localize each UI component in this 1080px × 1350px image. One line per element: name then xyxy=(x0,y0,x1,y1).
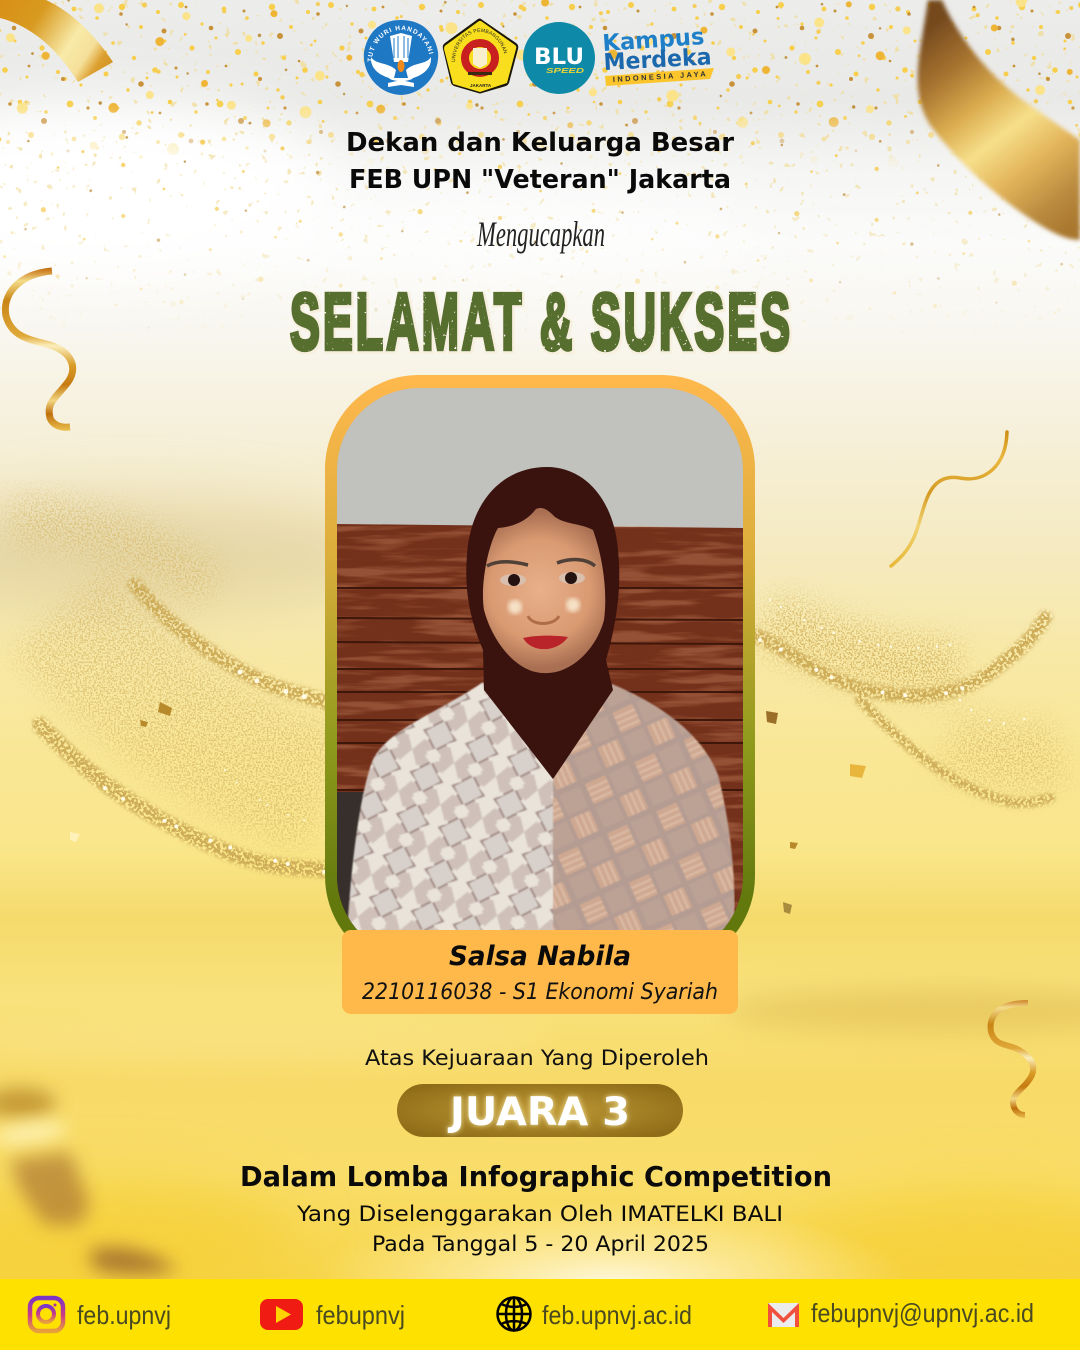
text: competition details: Yang Diselenggarakan Oleh IMATELKI BALI xyxy=(296,1202,783,1226)
streamer left xyxy=(5,271,73,427)
logo: UPN Veteran: UNIVERSITAS PEMBANGUNAN xyxy=(452,28,508,62)
logo: BLU Speed xyxy=(523,22,595,94)
title Selamat dan Sukses: SELAMAT & SUKSES xyxy=(290,276,790,366)
gold glitter confetti xyxy=(0,0,1080,340)
text: competition details: Dalam Lomba Infographic Competition xyxy=(240,1160,832,1193)
logo: Kampus Merdeka: Merdeka xyxy=(603,44,712,76)
heading: organiser: FEB UPN "Veteran" Jakarta xyxy=(349,165,731,195)
icon: youtube xyxy=(260,1299,303,1330)
handle: instagram: feb.upnvj xyxy=(77,1300,171,1330)
award pill: JUARA 3 xyxy=(447,1090,630,1135)
photo frame xyxy=(325,375,755,970)
logo: UPN Veteran xyxy=(442,18,518,94)
handle: website: feb.upnvj.ac.id xyxy=(542,1300,692,1330)
streamer right xyxy=(891,432,1007,566)
icon: globe xyxy=(498,1297,530,1331)
logo: Tut Wuri Handayani xyxy=(364,20,438,95)
gold sand swirls xyxy=(0,482,1074,914)
logos row xyxy=(364,18,714,95)
icon: instagram xyxy=(30,1298,63,1331)
heading: organiser xyxy=(346,128,734,195)
script word Mengucapkan: Mengucapkan xyxy=(476,214,605,254)
heading: organiser: Dekan dan Keluarga Besar xyxy=(346,128,734,158)
logo: UPN Veteran: JAKARTA xyxy=(470,83,492,88)
portrait photo xyxy=(337,388,743,960)
face xyxy=(483,508,605,673)
award pill xyxy=(397,1084,683,1137)
logo: Kampus Merdeka: INDONESIA JAYA xyxy=(613,69,707,84)
handle: email: febupnvj@upnvj.ac.id xyxy=(811,1298,1034,1328)
logo: Kampus Merdeka xyxy=(602,24,714,86)
ribbon bottom left xyxy=(0,1088,178,1274)
logo: BLU Speed: BLU xyxy=(534,45,584,70)
student id and programme: 2210116038 - S1 Ekonomi Syariah xyxy=(362,980,718,1005)
name plate xyxy=(342,930,738,1014)
student name: Salsa Nabila xyxy=(449,941,631,972)
logo: BLU Speed: SPEED xyxy=(546,68,584,75)
ribbon top left xyxy=(0,0,113,82)
hijab xyxy=(466,467,619,779)
text: reason: Atas Kejuaraan Yang Diperoleh xyxy=(365,1046,709,1070)
streamer bottom right xyxy=(991,1003,1033,1115)
ribbon top right xyxy=(918,0,1080,240)
text: competition details: Pada Tanggal 5 - 20 April 2025 xyxy=(372,1232,709,1256)
text: competition details xyxy=(240,1160,832,1256)
handle: youtube: febupnvj xyxy=(316,1300,405,1330)
blouse xyxy=(347,682,735,935)
logo: Kampus Merdeka: Kampus xyxy=(602,24,705,57)
logo: Tut Wuri Handayani: TUT WURI HANDAYANI xyxy=(368,26,434,62)
footer bar xyxy=(0,1279,1080,1350)
icon: gmail xyxy=(768,1303,799,1327)
